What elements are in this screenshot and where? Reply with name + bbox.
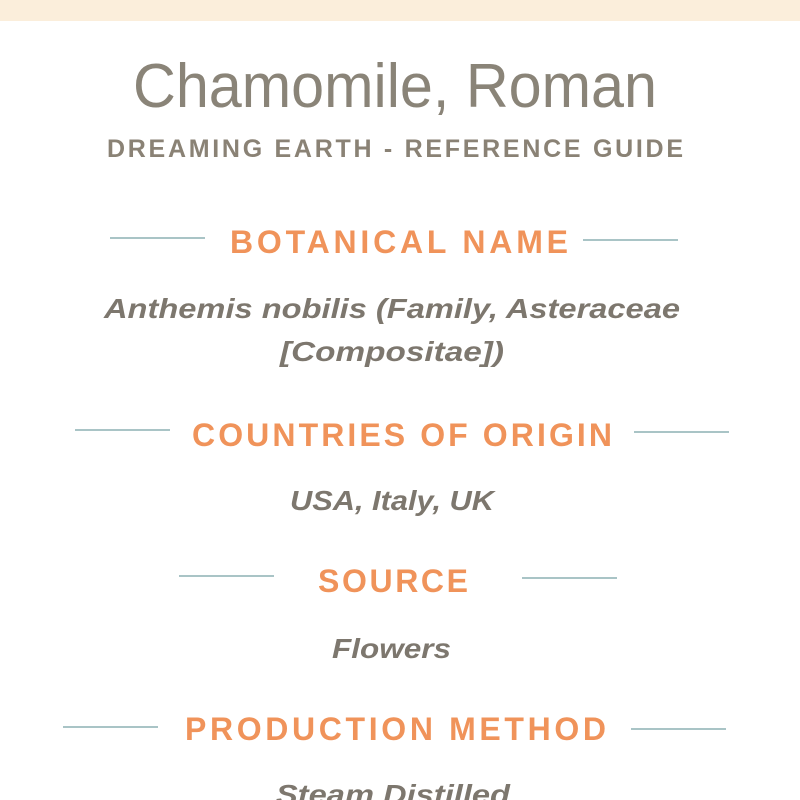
section: source: Flowers bbox=[332, 633, 451, 664]
section: botanical name: Anthemis nobilis (Family, Asteraceae bbox=[103, 293, 680, 324]
section: production method: PRODUCTION METHOD bbox=[185, 711, 606, 747]
section: source bbox=[179, 563, 617, 664]
section: botanical name: BOTANICAL NAME bbox=[230, 224, 568, 260]
section: countries of origin: COUNTRIES OF ORIGIN bbox=[192, 417, 612, 453]
section: production method bbox=[63, 711, 726, 800]
section: countries of origin: USA, Italy, UK bbox=[290, 485, 496, 516]
top band bbox=[0, 0, 800, 21]
section: source: SOURCE bbox=[318, 563, 468, 599]
subtitle: DREAMING EARTH - REFERENCE GUIDE bbox=[107, 135, 683, 163]
section: countries of origin bbox=[75, 417, 729, 516]
section: botanical name bbox=[103, 224, 680, 367]
title: Chamomile, Roman bbox=[133, 52, 657, 121]
section: botanical name: [Compositae]) bbox=[279, 336, 504, 367]
